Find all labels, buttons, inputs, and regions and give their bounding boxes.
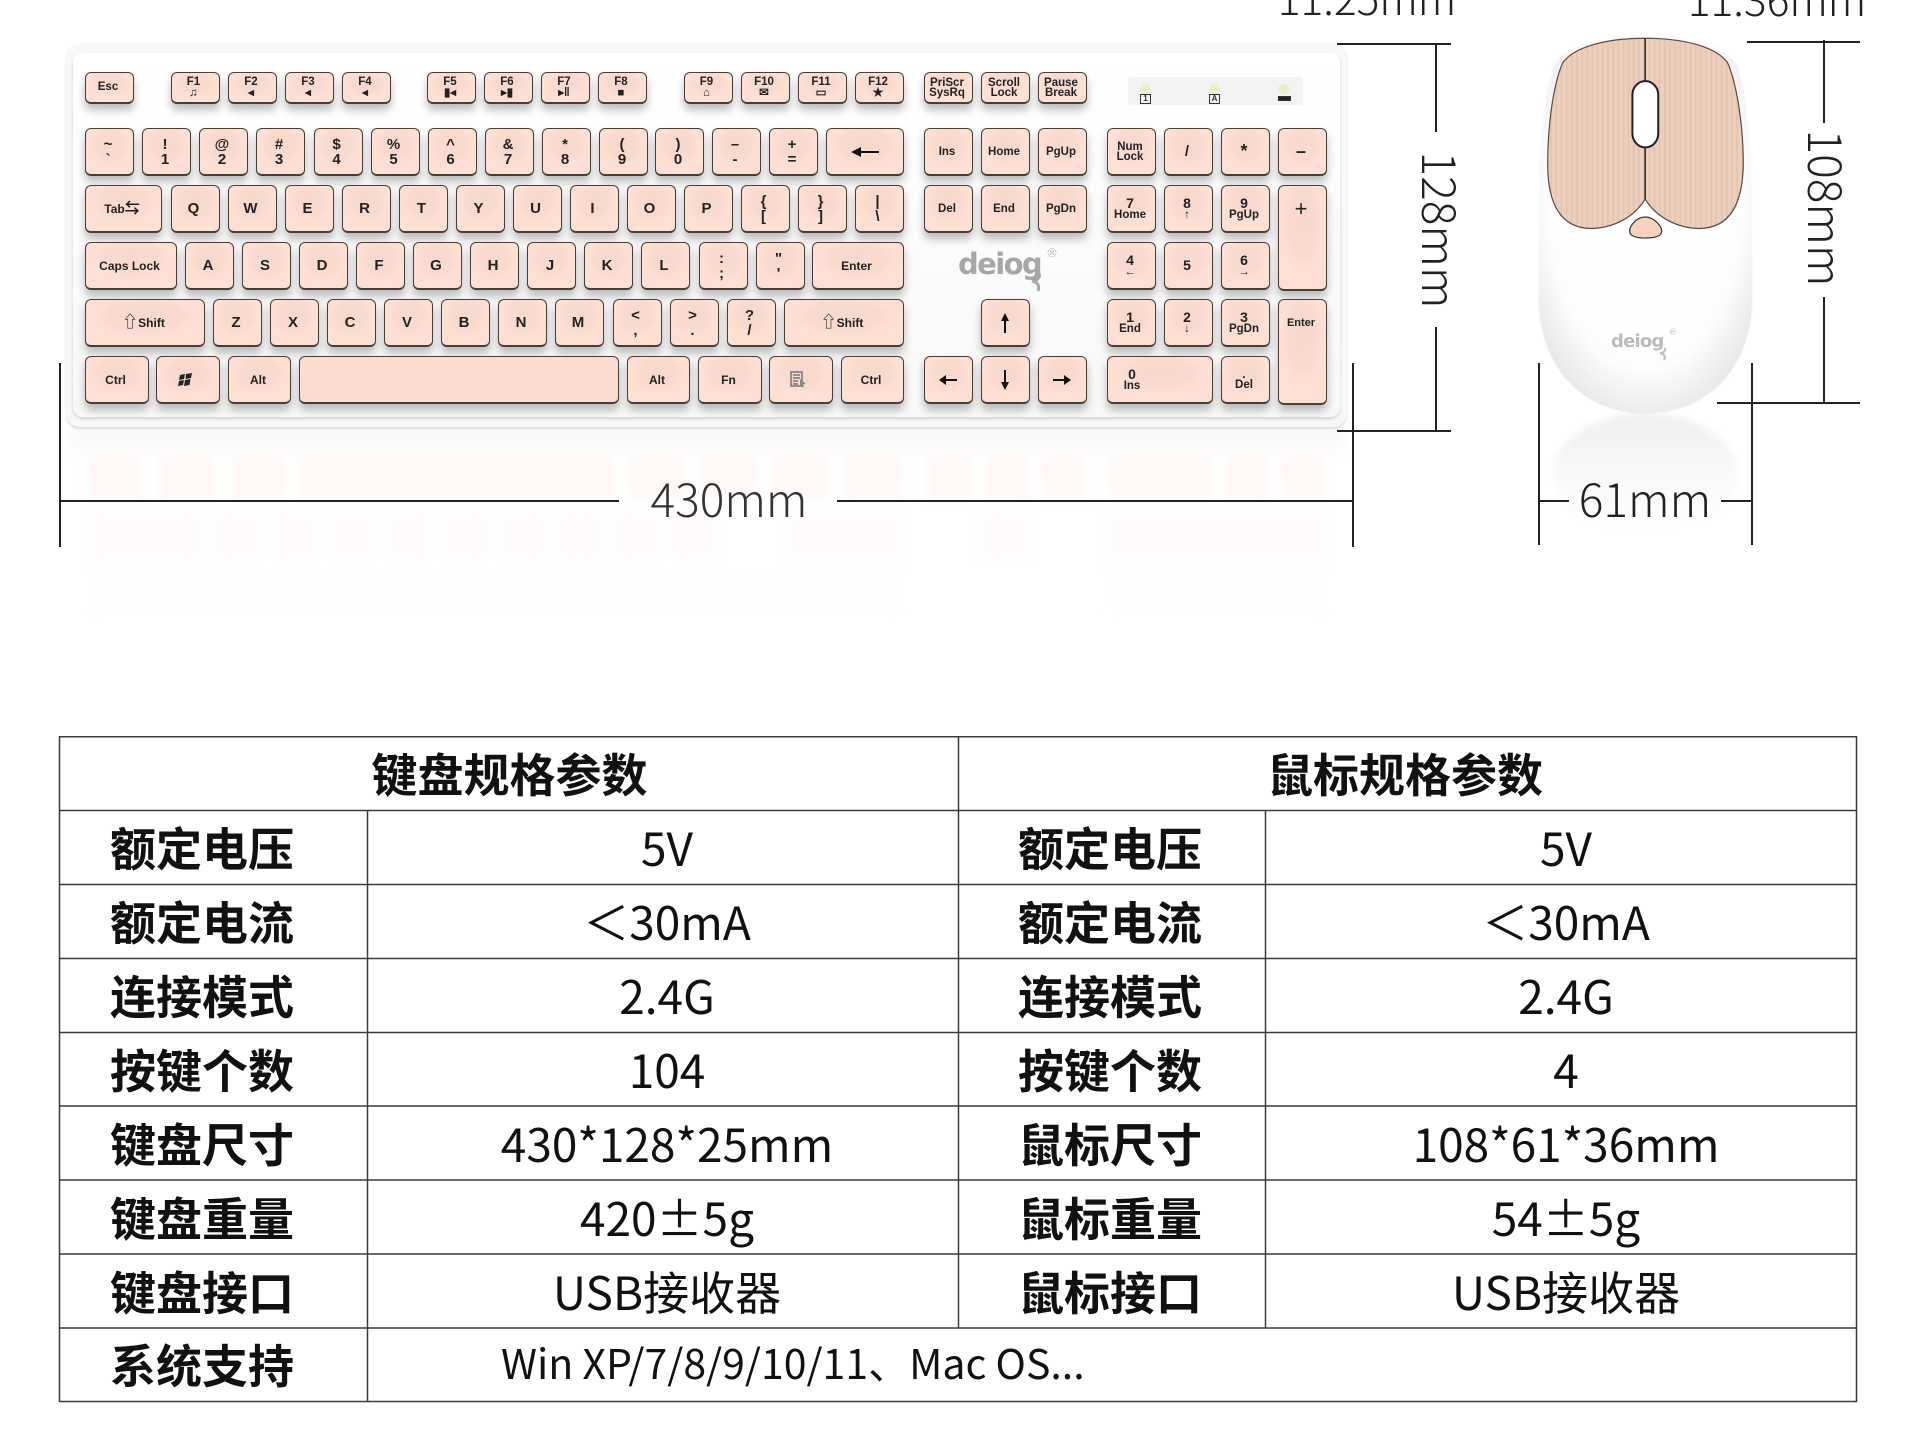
label: 键盘重量 <box>110 1184 294 1250</box>
numeric keypad: 5 <box>1183 256 1191 272</box>
key row: QWERTY: O <box>644 200 655 217</box>
key row: QWERTY: P <box>701 200 712 217</box>
label: 额定电压 <box>110 814 294 880</box>
key row: function keys: ✉ <box>759 86 769 98</box>
key row: ASDF: Enter <box>841 258 872 272</box>
numeric keypad: Num <box>1117 140 1143 152</box>
navigation key cluster: Break <box>1045 86 1077 98</box>
numeric keypad: → <box>1238 266 1250 278</box>
key row: ASDF: L <box>659 257 669 274</box>
key row: numbers: 8 <box>561 150 569 168</box>
key row: QWERTY: [ <box>761 208 766 224</box>
system support value: Win XP/7/8/9/10/11、Mac OS... <box>501 1331 1085 1391</box>
key row: QWERTY: Q <box>188 200 199 217</box>
keyboard logo <box>958 246 1058 292</box>
mouse logo <box>1611 328 1677 360</box>
key row: numbers: 4 <box>332 150 341 168</box>
key row: numbers: % <box>387 136 400 152</box>
key row: ZXCV: . <box>690 322 695 338</box>
key row: numbers: 0 <box>674 150 682 168</box>
key row: ASDF <box>80 242 909 301</box>
key row: QWERTY: Tab⇆ <box>104 200 140 216</box>
key row: numbers: - <box>732 150 738 168</box>
key row: numbers: # <box>275 136 283 152</box>
key row: ASDF: ; <box>719 264 724 282</box>
key row: ZXCV: V <box>402 314 412 331</box>
key row: QWERTY <box>80 185 909 244</box>
mouse value: 5V <box>1540 814 1592 880</box>
key row: function keys: F4 <box>358 76 372 88</box>
numeric keypad: 3 <box>1240 308 1248 324</box>
row: connection mode <box>110 962 1614 1028</box>
row: key count <box>110 1036 1579 1102</box>
label: 系统支持 <box>110 1331 294 1397</box>
key row: ZXCV: M <box>572 314 584 331</box>
mouse <box>1539 38 1752 462</box>
key row: QWERTY: T <box>417 200 426 217</box>
keyboard value: 104 <box>629 1036 705 1102</box>
heading: mouse specs: 鼠标规格参数 <box>1267 740 1543 806</box>
keyboard value: USB接收器 <box>553 1258 781 1324</box>
numeric keypad: . <box>1242 368 1246 380</box>
key row: bottom modifiers and space: Ctrl <box>105 372 126 386</box>
key row: QWERTY: W <box>243 200 258 217</box>
key row: ZXCV: / <box>747 322 752 338</box>
key row: numbers: $ <box>332 136 341 152</box>
key row: numbers: 1 <box>161 150 169 168</box>
navigation key cluster <box>919 72 1092 415</box>
key row: numbers: @ <box>215 136 229 152</box>
key row: function keys: ◂ <box>305 86 311 98</box>
key row: function keys: ▮◂ <box>444 86 456 98</box>
mouse logo: ® <box>1668 328 1677 338</box>
key row: ZXCV: ⇧Shift <box>821 314 863 330</box>
numeric keypad: / <box>1185 143 1189 160</box>
mouse value: 2.4G <box>1518 962 1614 1028</box>
key row: function keys: F12 <box>868 76 888 88</box>
key row: function keys: ■ <box>618 86 624 98</box>
navigation key cluster: Lock <box>991 86 1017 98</box>
key row: QWERTY: { <box>761 192 766 210</box>
numeric keypad: Ins <box>1124 380 1140 392</box>
key row: function keys: F6 <box>500 76 514 88</box>
key row: QWERTY: ] <box>818 208 823 224</box>
key row: ZXCV: Z <box>231 314 241 331</box>
numeric keypad: Enter <box>1287 317 1315 329</box>
key row: function keys: Esc <box>98 81 118 93</box>
key row: function keys: F2 <box>244 76 258 88</box>
keyboard indicator LEDs: 1 <box>1143 94 1148 103</box>
key row: numbers: 6 <box>446 150 455 168</box>
label: 鼠标重量 <box>1018 1184 1202 1250</box>
keyboard value: 420±5g <box>580 1184 754 1250</box>
navigation key cluster: PgUp <box>1046 146 1076 158</box>
key row: numbers: + <box>788 136 796 152</box>
key row: ASDF: D <box>317 257 327 274</box>
key row: numbers: 9 <box>618 150 626 168</box>
keyboard value: 2.4G <box>619 962 715 1028</box>
key row: numbers: & <box>503 136 513 152</box>
key row: QWERTY: Y <box>473 200 484 217</box>
key row: QWERTY: | <box>875 192 880 210</box>
numeric keypad: PgUp <box>1229 208 1259 220</box>
row: weight <box>110 1184 1640 1250</box>
key row: numbers: – <box>731 136 739 152</box>
key row: QWERTY: I <box>590 200 595 217</box>
spec table <box>58 736 1858 1402</box>
key row: ZXCV: , <box>633 322 638 338</box>
key row: ASDF: ' <box>777 264 780 282</box>
dimension: keyboard width 430mm: 430mm <box>650 465 808 531</box>
key row: function keys: F9 <box>700 76 713 88</box>
label: 键盘尺寸 <box>110 1110 294 1176</box>
heading: keyboard specs: 键盘规格参数 <box>372 740 648 806</box>
keyboard indicator LEDs <box>1128 77 1303 105</box>
keyboard top plate <box>73 53 1340 417</box>
key row: ZXCV: B <box>459 314 469 331</box>
label: 按键个数 <box>110 1036 294 1102</box>
key row: function keys: F1 <box>187 76 200 88</box>
key row: ASDF: K <box>602 257 612 274</box>
numeric keypad: 9 <box>1240 194 1248 210</box>
key row: numbers: ( <box>620 136 624 152</box>
key row: ASDF: F <box>374 257 384 274</box>
numeric keypad: 6 <box>1240 252 1248 268</box>
mouse value: 4 <box>1553 1036 1579 1102</box>
row: system support <box>110 1331 1085 1397</box>
key row: function keys: ◂ <box>362 86 368 98</box>
numeric keypad: 1 <box>1126 308 1134 324</box>
keyboard logo: deiog <box>958 247 1041 281</box>
key row: numbers: = <box>788 150 796 168</box>
keyboard value: ＜30mA <box>583 888 751 954</box>
numeric keypad: Home <box>1114 208 1146 220</box>
numeric keypad <box>1102 128 1332 416</box>
keyboard body <box>66 43 1347 427</box>
navigation key cluster: Del <box>938 202 956 214</box>
numeric keypad: 2 <box>1183 308 1191 324</box>
key row: ZXCV <box>80 299 909 358</box>
key row: numbers: 2 <box>218 150 226 168</box>
numeric keypad: ↓ <box>1184 322 1190 334</box>
key row: numbers: ) <box>676 136 680 152</box>
key row: ASDF: G <box>430 257 442 274</box>
key row: function keys: F10 <box>754 76 774 88</box>
keyboard reflection <box>94 458 1320 494</box>
label: 按键个数 <box>1018 1036 1202 1102</box>
navigation key cluster: Ins <box>939 146 955 158</box>
key row: numbers: ` <box>105 150 110 168</box>
key row: ASDF: S <box>260 257 270 274</box>
key row: QWERTY: U <box>530 200 541 217</box>
key row: ASDF: Caps Lock <box>99 258 160 272</box>
key row: function keys: ⌂ <box>703 86 710 98</box>
key row: function keys: F11 <box>811 76 831 88</box>
label: 连接模式 <box>110 962 294 1028</box>
dimension: keyboard depth 128mm: 128mm <box>1408 152 1474 308</box>
navigation key cluster: Scroll <box>988 76 1020 88</box>
numeric keypad: PgDn <box>1229 322 1259 334</box>
key row: bottom modifiers and space: Alt <box>250 372 266 386</box>
numeric keypad: + <box>1295 196 1307 221</box>
key row: bottom modifiers and space <box>80 356 909 415</box>
label: 鼠标接口 <box>1018 1258 1202 1324</box>
row: rated current <box>110 888 1650 954</box>
key row: function keys: ▸▮ <box>501 86 513 98</box>
key row: function keys: F7 <box>557 76 571 88</box>
key row: function keys: ★ <box>872 86 884 98</box>
mouse value: USB接收器 <box>1452 1258 1680 1324</box>
keyboard logo: ® <box>1046 246 1058 260</box>
key row: QWERTY: } <box>818 192 823 210</box>
key row: ZXCV: C <box>345 314 355 331</box>
mouse value: 54±5g <box>1492 1184 1640 1250</box>
label: 鼠标尺寸 <box>1018 1110 1202 1176</box>
key row: ASDF: J <box>546 257 554 274</box>
numeric keypad: – <box>1296 141 1306 161</box>
key row: ASDF: " <box>775 250 782 266</box>
label: 额定电流 <box>110 888 294 954</box>
numeric keypad: 0 <box>1128 366 1136 382</box>
keyboard value: 5V <box>641 814 693 880</box>
key row: ASDF: A <box>203 257 213 274</box>
navigation key cluster: End <box>993 202 1015 214</box>
key row: bottom modifiers and space: Alt <box>649 372 665 386</box>
key row: numbers: ~ <box>104 136 112 152</box>
navigation key cluster: Home <box>988 146 1020 158</box>
numeric keypad: ↑ <box>1184 208 1190 220</box>
navigation key cluster: PriScr <box>930 76 964 88</box>
key row: function keys: ▭ <box>816 86 826 98</box>
key row: function keys: F5 <box>443 76 457 88</box>
key row: function keys <box>80 72 909 115</box>
row: dimensions <box>110 1110 1719 1176</box>
mouse logo: deiog <box>1611 331 1664 352</box>
key row: ZXCV: > <box>688 306 697 324</box>
key row: numbers: 5 <box>389 150 398 168</box>
key row: numbers: ^ <box>446 136 455 152</box>
mouse value: 108*61*36mm <box>1413 1110 1719 1176</box>
key row: function keys: F8 <box>614 76 628 88</box>
key row: QWERTY: E <box>302 200 312 217</box>
key row: ZXCV: ⇧Shift <box>122 314 165 330</box>
numeric keypad: Lock <box>1117 150 1143 162</box>
key row: QWERTY: R <box>359 200 370 217</box>
label: 键盘接口 <box>110 1258 294 1324</box>
key row: ASDF: H <box>488 257 498 274</box>
key row: ZXCV: N <box>516 314 526 331</box>
key row: function keys: ◂ <box>248 86 254 98</box>
key row: numbers: ! <box>162 136 168 152</box>
key row: ZXCV: < <box>631 306 640 324</box>
keyboard value: 430*128*25mm <box>501 1110 833 1176</box>
row: interface <box>110 1258 1680 1324</box>
table header row <box>372 740 1543 806</box>
label: 额定电流 <box>1018 888 1202 954</box>
key row: function keys: F3 <box>301 76 315 88</box>
numeric keypad: 8 <box>1183 194 1191 210</box>
key row: numbers <box>80 128 909 187</box>
key row: numbers: * <box>562 136 568 152</box>
numeric keypad: 4 <box>1126 252 1134 268</box>
dimension: mouse width 61mm: 61mm <box>1579 465 1711 531</box>
navigation key cluster: Pause <box>1044 76 1078 88</box>
key row: bottom modifiers and space: Fn <box>721 372 736 386</box>
mouse value: ＜30mA <box>1482 888 1650 954</box>
key row: ASDF: : <box>719 250 724 266</box>
navigation key cluster: SysRq <box>929 86 965 98</box>
navigation key cluster: PgDn <box>1046 202 1076 214</box>
numeric keypad: ← <box>1124 266 1136 278</box>
key row: function keys: ♫ <box>189 86 198 98</box>
key row: bottom modifiers and space: Ctrl <box>861 372 881 386</box>
numeric keypad: * <box>1240 141 1248 161</box>
key row: numbers: 3 <box>275 150 283 168</box>
label: 额定电压 <box>1018 814 1202 880</box>
row: rated voltage <box>110 814 1592 880</box>
numeric keypad: Del <box>1235 378 1253 390</box>
numeric keypad: End <box>1119 322 1141 334</box>
label: 连接模式 <box>1018 962 1202 1028</box>
key row: ZXCV: X <box>288 314 298 331</box>
keyboard indicator LEDs: A <box>1212 94 1217 103</box>
key row: function keys: ▸‖ <box>558 86 570 98</box>
key row: numbers: 7 <box>504 150 512 168</box>
key row: ZXCV: ? <box>745 306 754 324</box>
numeric keypad: 7 <box>1126 194 1134 210</box>
key row: QWERTY: \ <box>875 208 880 224</box>
dimension: mouse length 108mm: 108mm <box>1794 130 1860 286</box>
